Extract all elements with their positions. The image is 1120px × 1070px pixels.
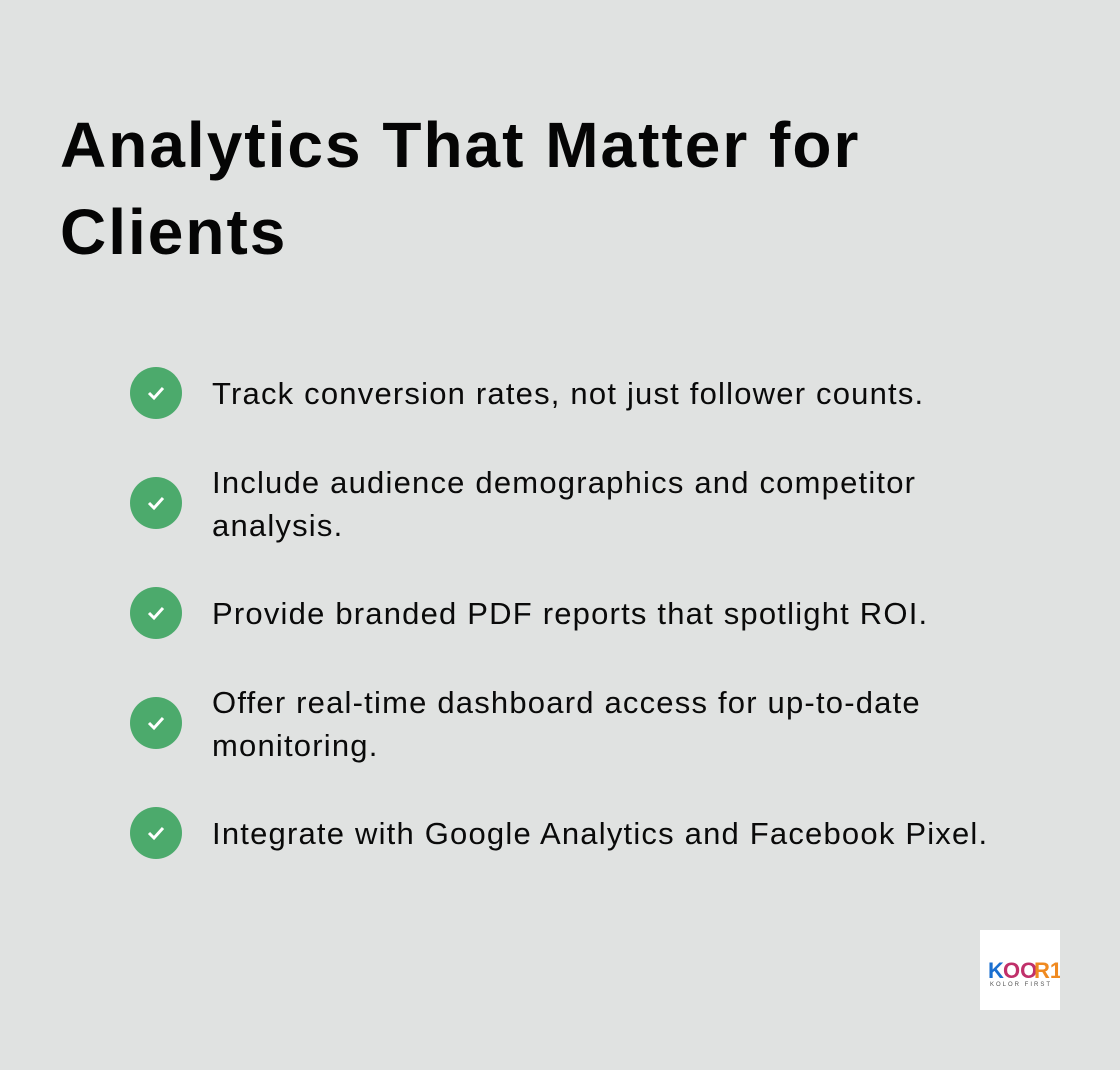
icon: check xyxy=(130,697,182,749)
icon: check xyxy=(130,367,182,419)
title xyxy=(60,109,860,268)
item 3 xyxy=(130,587,928,639)
item 5: Integrate with Google Analytics and Facebook Pixel. xyxy=(212,816,988,851)
logo: K xyxy=(988,958,1004,983)
icon: check xyxy=(130,587,182,639)
logo: KOLOR FIRST xyxy=(990,982,1052,988)
item 5 xyxy=(130,807,988,859)
logo xyxy=(980,930,1060,1010)
title: Clients xyxy=(60,196,287,268)
logo: OO xyxy=(1003,958,1037,983)
item 3: Provide branded PDF reports that spotlight ROI. xyxy=(212,596,928,631)
item 1: Track conversion rates, not just follower counts. xyxy=(212,376,924,411)
icon: check xyxy=(130,477,182,529)
item 4: Offer real-time dashboard access for up-to-date monitoring. xyxy=(212,685,921,763)
item 1 xyxy=(130,367,924,419)
icon: check xyxy=(130,807,182,859)
title: Analytics That Matter for xyxy=(60,109,860,181)
item 2: Include audience demographics and competitor analysis. xyxy=(212,465,916,543)
